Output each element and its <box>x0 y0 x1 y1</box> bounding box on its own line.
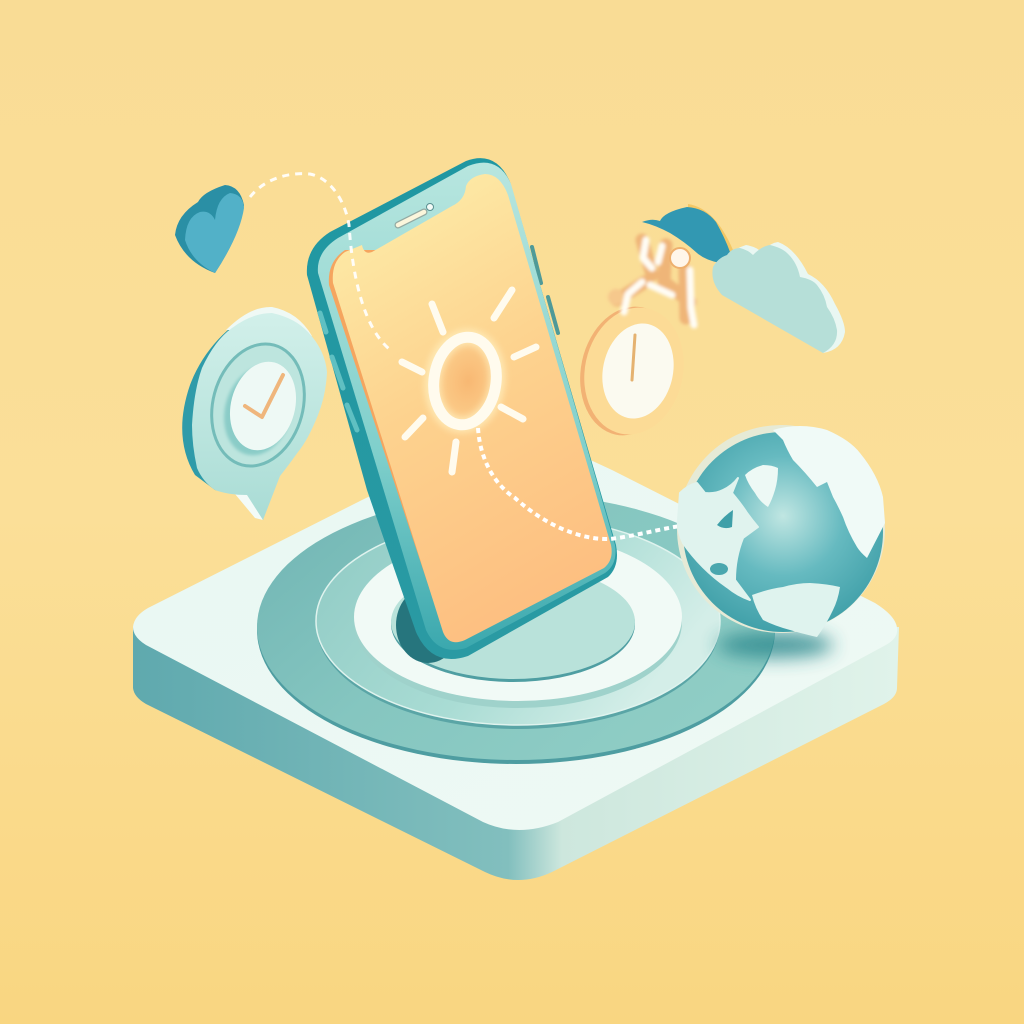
centre disc <box>391 565 635 679</box>
heart side <box>175 185 244 273</box>
globe sphere <box>683 432 883 632</box>
icon: wing shape <box>642 204 733 263</box>
clock hand <box>632 335 635 380</box>
sun core <box>426 333 504 429</box>
americas lake <box>717 510 733 528</box>
bubble side <box>182 308 300 520</box>
continent: north <box>773 426 885 558</box>
inner ring rim <box>354 536 682 708</box>
icon: clock speech bubble <box>182 307 327 520</box>
notch speaker inner <box>398 212 424 225</box>
notch camera <box>426 204 434 210</box>
heart front <box>185 193 244 273</box>
phone side buttons <box>320 313 357 430</box>
figures round detail <box>670 248 690 268</box>
screen orange edge <box>329 250 445 636</box>
outer ring <box>257 494 775 760</box>
inner ring <box>354 533 682 701</box>
notch speaker <box>398 212 424 225</box>
platform side wall <box>133 627 899 880</box>
bubble top rim <box>226 307 312 336</box>
americas lake south <box>710 563 728 575</box>
wing teal <box>642 207 730 263</box>
phone bezel <box>318 163 616 650</box>
phone contact shadow <box>396 587 460 663</box>
clock face <box>594 317 682 425</box>
continent: island <box>745 465 778 507</box>
icon: alarm clock <box>569 240 695 445</box>
centre disc rim <box>391 566 635 682</box>
platform <box>133 425 899 880</box>
platform top surface <box>133 425 897 830</box>
continent: south <box>752 583 840 637</box>
figures on top, orange <box>608 240 694 325</box>
middle ring rim <box>316 519 720 729</box>
phone <box>307 158 617 663</box>
middle ring <box>316 517 720 725</box>
sun icon <box>402 290 536 472</box>
clock face <box>220 354 306 458</box>
wing yellow rim <box>688 204 733 254</box>
clock face shadow <box>214 359 302 463</box>
bubble tail rim <box>235 490 263 520</box>
clock body <box>573 298 695 444</box>
globe glass rim <box>677 425 885 633</box>
clock edge <box>569 297 689 445</box>
cloud front <box>712 245 837 353</box>
bubble front <box>192 313 327 520</box>
sun glow <box>427 333 503 429</box>
globe <box>677 425 885 658</box>
cloud back <box>721 242 845 353</box>
globe shadow <box>717 632 833 658</box>
phone right buttons <box>532 247 558 333</box>
clock hands <box>245 375 283 417</box>
continent: americas <box>678 478 758 600</box>
phone body <box>307 158 617 659</box>
outer ring rim <box>257 496 775 764</box>
bubble ring <box>198 333 318 477</box>
dotted path: sun to globe <box>478 428 680 539</box>
dotted path: heart to sun <box>250 174 393 352</box>
phone screen <box>333 174 612 642</box>
icon: heart <box>175 185 244 273</box>
icon: cloud <box>712 242 845 353</box>
